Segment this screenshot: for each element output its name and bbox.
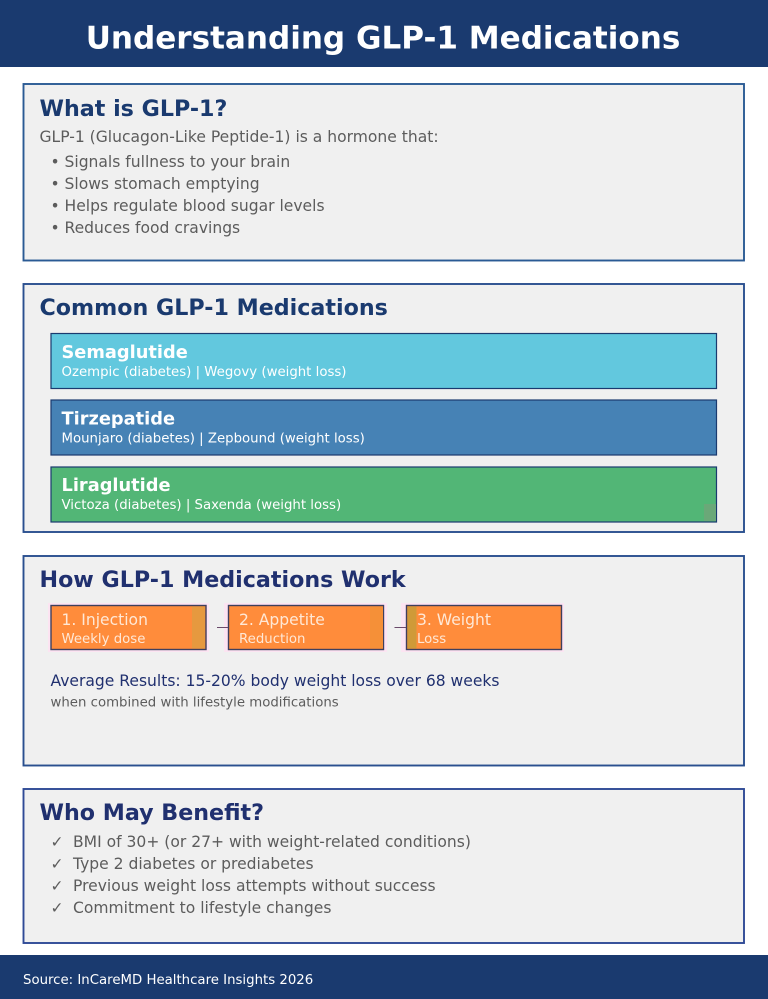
card: semaglutide: Ozempic (diabetes) | Wegovy (weight loss) [62, 365, 346, 380]
card: semaglutide: Semaglutide [62, 342, 188, 363]
list: GLP-1 functions: • [50, 175, 60, 193]
step: weight: Loss [417, 632, 446, 647]
checklist: eligibility: ✓ [50, 855, 64, 873]
list: GLP-1 functions: Slows stomach emptying [64, 175, 260, 193]
card: liraglutide: Victoza (diabetes) | Saxenda (weight loss) [62, 498, 341, 513]
step: injection: 1. Injection [62, 611, 148, 629]
text block: average results: Average Results: 15-20% body weight loss over 68 weeks [50, 672, 500, 690]
arrow: injection to appetite [217, 626, 228, 628]
checklist: eligibility: ✓ [50, 899, 64, 917]
title: Understanding GLP-1 Medications [86, 20, 680, 56]
list: GLP-1 functions: • [50, 219, 60, 237]
heading: how medications work: How GLP-1 Medications Work [40, 567, 407, 593]
list: GLP-1 functions: Signals fullness to your brain [64, 153, 290, 171]
step: injection [48, 603, 209, 652]
step: appetite: Reduction [239, 632, 305, 647]
checklist: eligibility [50, 833, 471, 917]
card: semaglutide [51, 334, 716, 388]
list: GLP-1 functions [50, 153, 325, 237]
panel: common medications [24, 284, 744, 532]
text block: results note: when combined with lifestyle modifications [50, 696, 339, 710]
card: liraglutide [51, 467, 716, 522]
panel: what is GLP-1 [24, 84, 744, 260]
card: tirzepatide: Mounjaro (diabetes) | Zepbound (weight loss) [62, 432, 365, 446]
panel: who may benefit [24, 789, 744, 943]
arrow: appetite to weight [394, 626, 406, 628]
list: GLP-1 functions: Reduces food cravings [64, 219, 240, 237]
checklist: eligibility: Previous weight loss attempts without success [73, 877, 436, 895]
step: appetite [224, 603, 387, 652]
step: weight: 3. Weight [417, 611, 491, 629]
checklist: eligibility: Commitment to lifestyle changes [73, 899, 331, 917]
footer banner [0, 955, 768, 999]
source line: Source: InCareMD Healthcare Insights 2026 [23, 973, 313, 988]
title banner [0, 0, 768, 67]
checklist: eligibility: ✓ [50, 833, 64, 851]
checklist: eligibility: Type 2 diabetes or prediabetes [72, 855, 314, 873]
list: GLP-1 functions: • [50, 197, 60, 215]
heading: who may benefit: Who May Benefit? [40, 800, 264, 826]
list: GLP-1 functions: • [50, 153, 60, 171]
card: liraglutide: Liraglutide [62, 475, 171, 496]
heading: common medications: Common GLP-1 Medications [40, 295, 388, 321]
checklist: eligibility: BMI of 30+ (or 27+ with weight-related conditions) [73, 833, 471, 851]
step: injection: Weekly dose [62, 632, 145, 647]
text block: definition: GLP-1 (Glucagon-Like Peptide-1) is a hormone that: [40, 128, 439, 146]
panel: how medications work [24, 556, 744, 766]
heading: what is GLP-1: What is GLP-1? [40, 96, 227, 122]
card: tirzepatide: Tirzepatide [62, 408, 175, 430]
checklist: eligibility: ✓ [50, 877, 64, 895]
list: GLP-1 functions: Helps regulate blood sugar levels [64, 197, 325, 215]
step: appetite: 2. Appetite [239, 611, 325, 629]
step: weight [401, 603, 564, 652]
card: tirzepatide [51, 400, 716, 455]
